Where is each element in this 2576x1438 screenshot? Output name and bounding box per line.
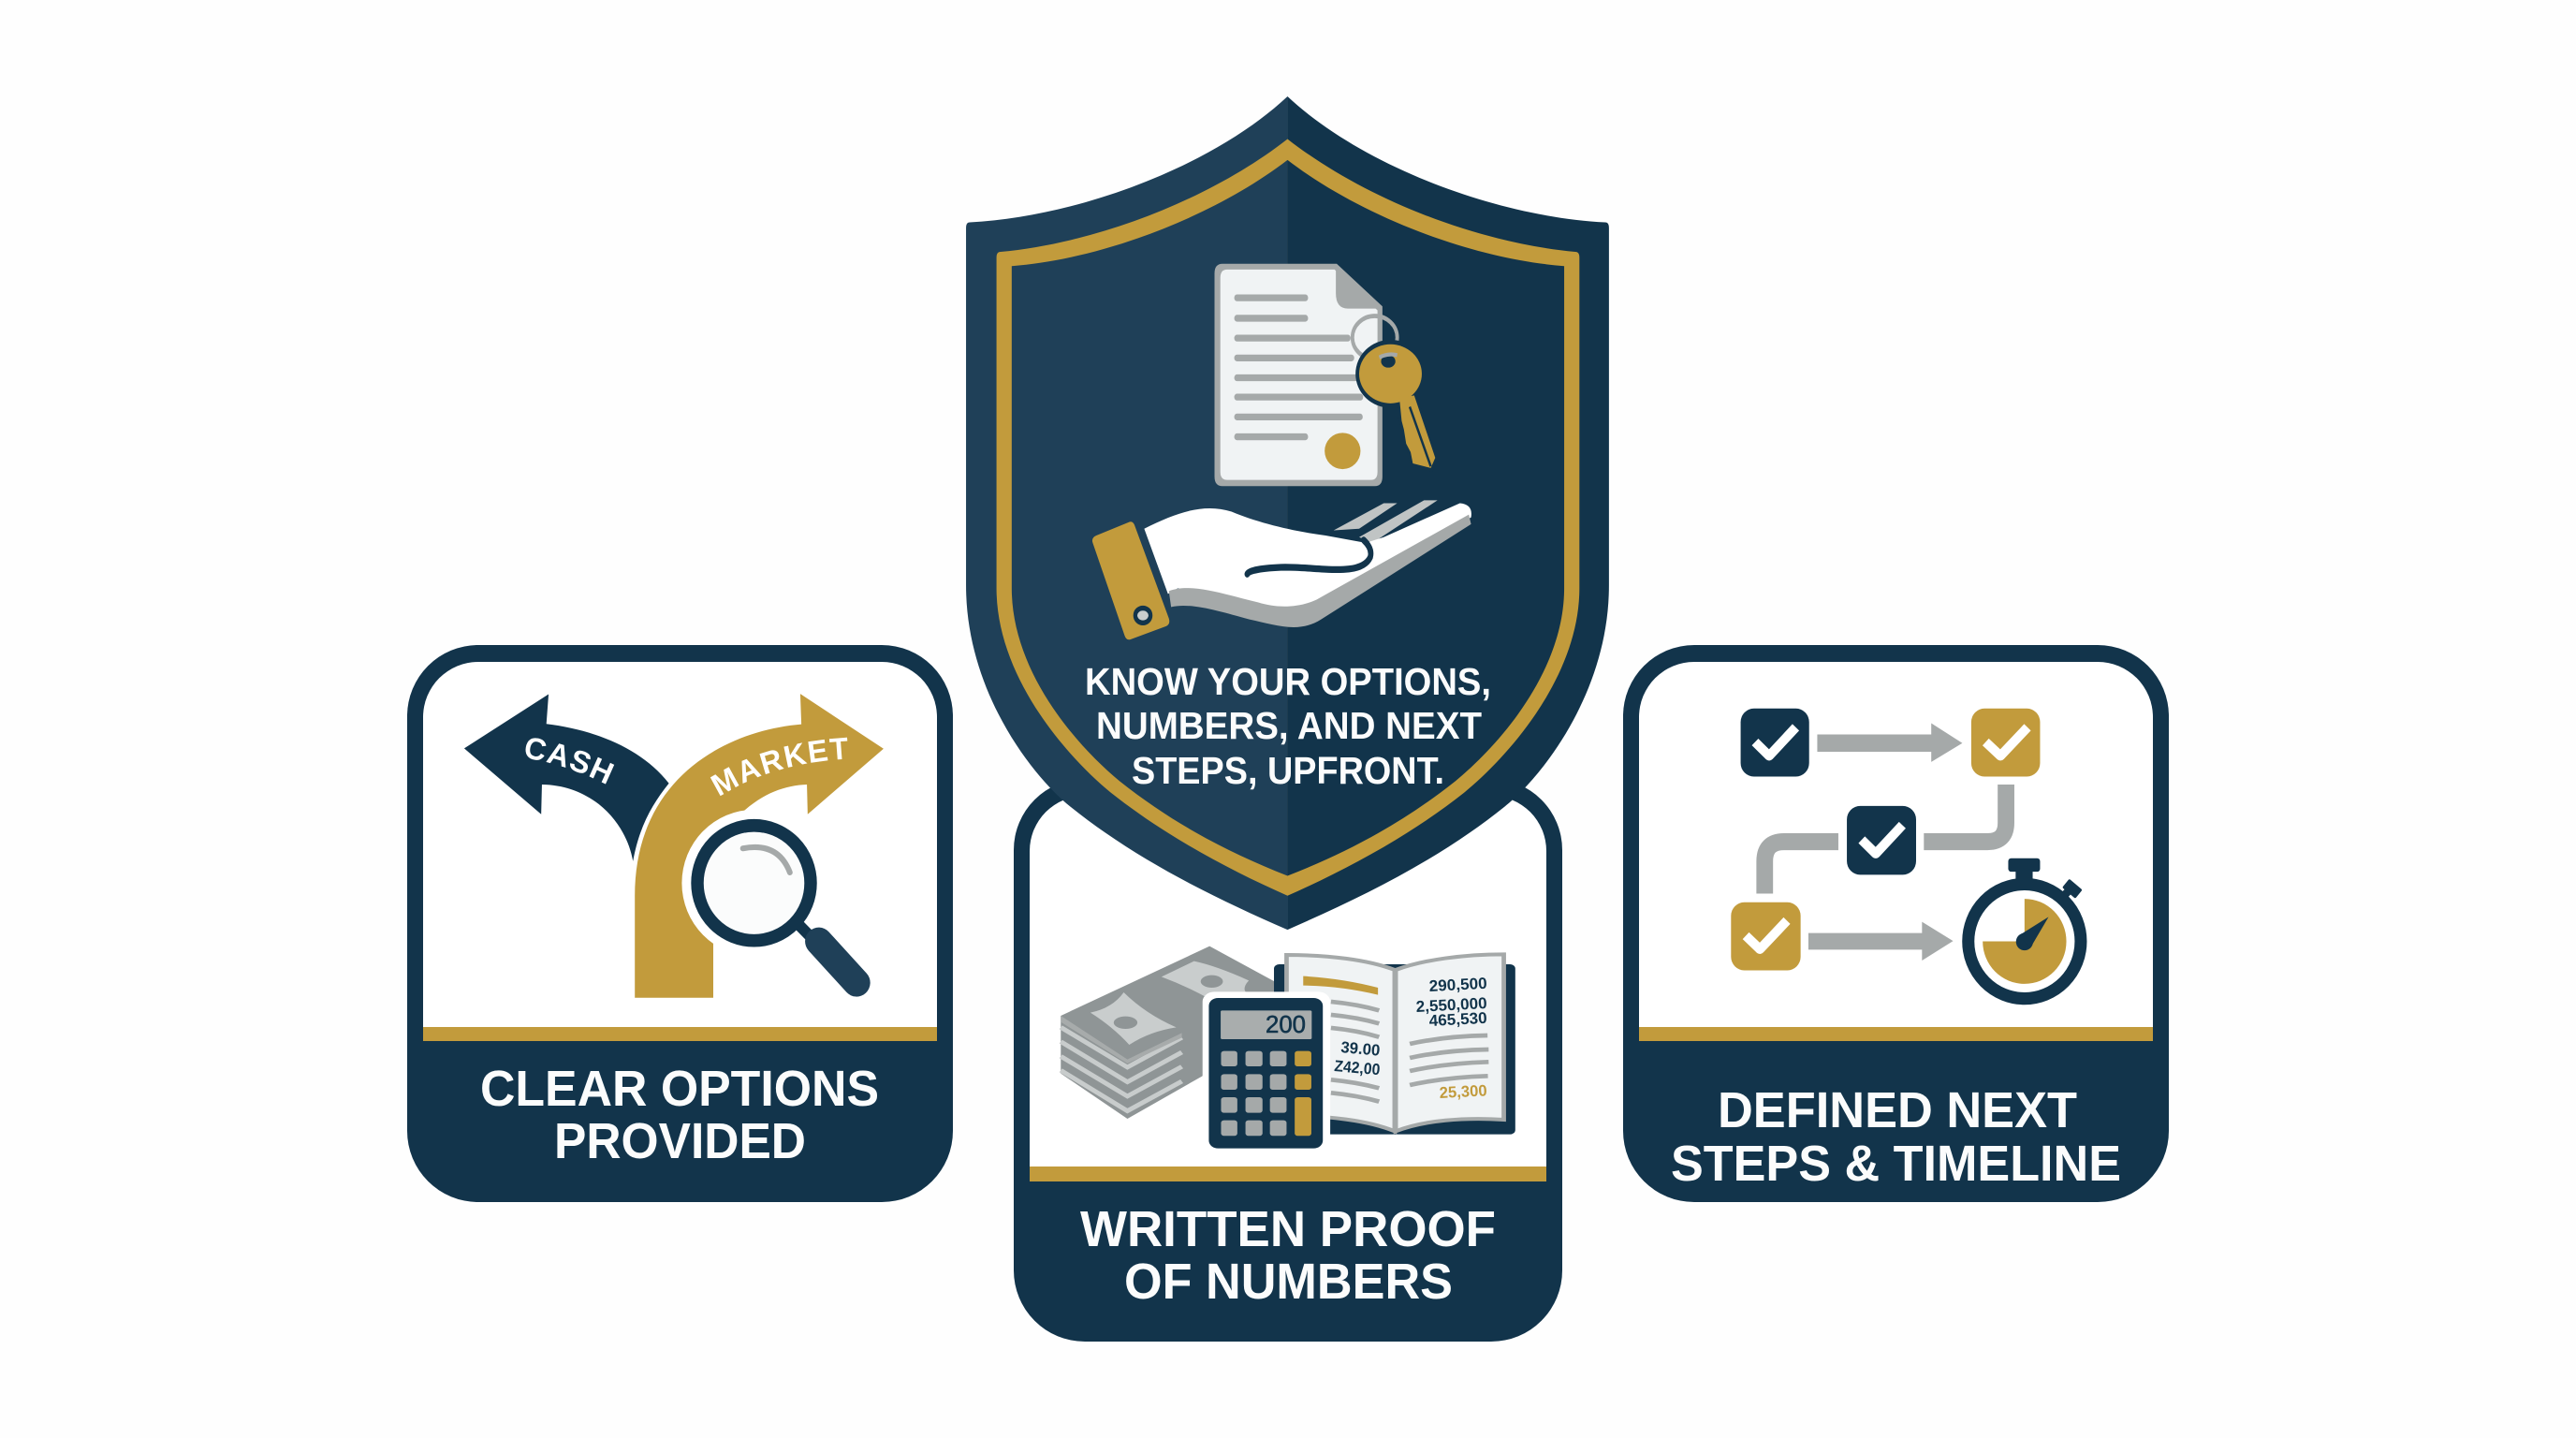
panel frame <box>1014 779 1562 1342</box>
arrow: cash: CASH <box>526 738 614 785</box>
gold band <box>1639 1027 2153 1041</box>
icon: forked arrows with magnifier <box>464 694 884 998</box>
shield message <box>1085 660 1491 792</box>
icon: key on ring <box>1353 316 1439 472</box>
icon: magnifier <box>681 810 856 998</box>
label: defined next steps and timeline <box>1671 1082 2121 1192</box>
panel white area <box>423 662 937 1027</box>
arrow: market <box>635 694 884 998</box>
ledger figures <box>1334 975 1487 1102</box>
label: written proof of numbers <box>1080 1201 1496 1310</box>
icon: open hand with gold cuff <box>1092 500 1471 639</box>
panel frame <box>1623 645 2169 1202</box>
icon: money, calculator and ledger <box>1061 946 1515 1154</box>
panel: clear options provided <box>407 645 953 1202</box>
label: defined next steps and timeline: STEPS & TIMELINE <box>1671 1136 2121 1192</box>
icon: stopwatch <box>1969 858 2083 999</box>
label: written proof of numbers: OF NUMBERS <box>1124 1254 1453 1310</box>
icon: money stack <box>1061 946 1278 1119</box>
shield message: NUMBERS, AND NEXT <box>1096 704 1482 747</box>
ledger figures: 465,530 <box>1428 1009 1487 1030</box>
central shield <box>966 96 1609 930</box>
icon: open ledger <box>1274 954 1515 1135</box>
label: clear options provided: PROVIDED <box>554 1113 806 1169</box>
ledger figures: 25,300 <box>1439 1081 1487 1102</box>
arrow: cash <box>464 695 668 861</box>
check box 1 <box>1741 709 1809 777</box>
panel white area <box>1030 796 1546 1167</box>
connector: step 3 to 4 <box>1764 842 1838 893</box>
panel frame <box>407 645 953 1202</box>
ledger figures: Z42,00 <box>1334 1057 1381 1078</box>
panel: written proof of numbers <box>1014 779 1562 1342</box>
connector: step 2 to 3 <box>1924 785 2006 842</box>
check box 4 <box>1731 902 1801 970</box>
calculator display value: 200 <box>1266 1010 1306 1038</box>
icon: checklist flow and stopwatch <box>1731 709 2083 999</box>
label: clear options provided <box>480 1061 879 1169</box>
shield message: STEPS, UPFRONT. <box>1132 749 1444 792</box>
gold band <box>423 1027 937 1041</box>
label: defined next steps and timeline: DEFINED NEXT <box>1718 1082 2077 1138</box>
ledger figures: 290,500 <box>1428 975 1487 995</box>
panel: defined next steps and timeline <box>1623 645 2169 1202</box>
gold band <box>1030 1167 1546 1181</box>
shield body and gold border <box>966 96 1609 930</box>
arrow: step 4 to stopwatch <box>1808 922 1954 961</box>
label: written proof of numbers: WRITTEN PROOF <box>1080 1201 1496 1257</box>
icon: document with seal <box>1215 264 1383 486</box>
label: clear options provided: CLEAR OPTIONS <box>480 1061 879 1117</box>
shield message: KNOW YOUR OPTIONS, <box>1085 660 1491 703</box>
icon: calculator <box>1203 991 1330 1154</box>
arrow: market: MARKET <box>710 738 848 796</box>
panel white area <box>1639 662 2153 1027</box>
check box 3 <box>1847 806 1916 874</box>
ledger figures: 39.00 <box>1340 1038 1381 1060</box>
ledger figures: 2,550,000 <box>1415 994 1487 1016</box>
arrow: step 1 to 2 <box>1817 723 1962 762</box>
check box 2 <box>1971 709 2040 777</box>
